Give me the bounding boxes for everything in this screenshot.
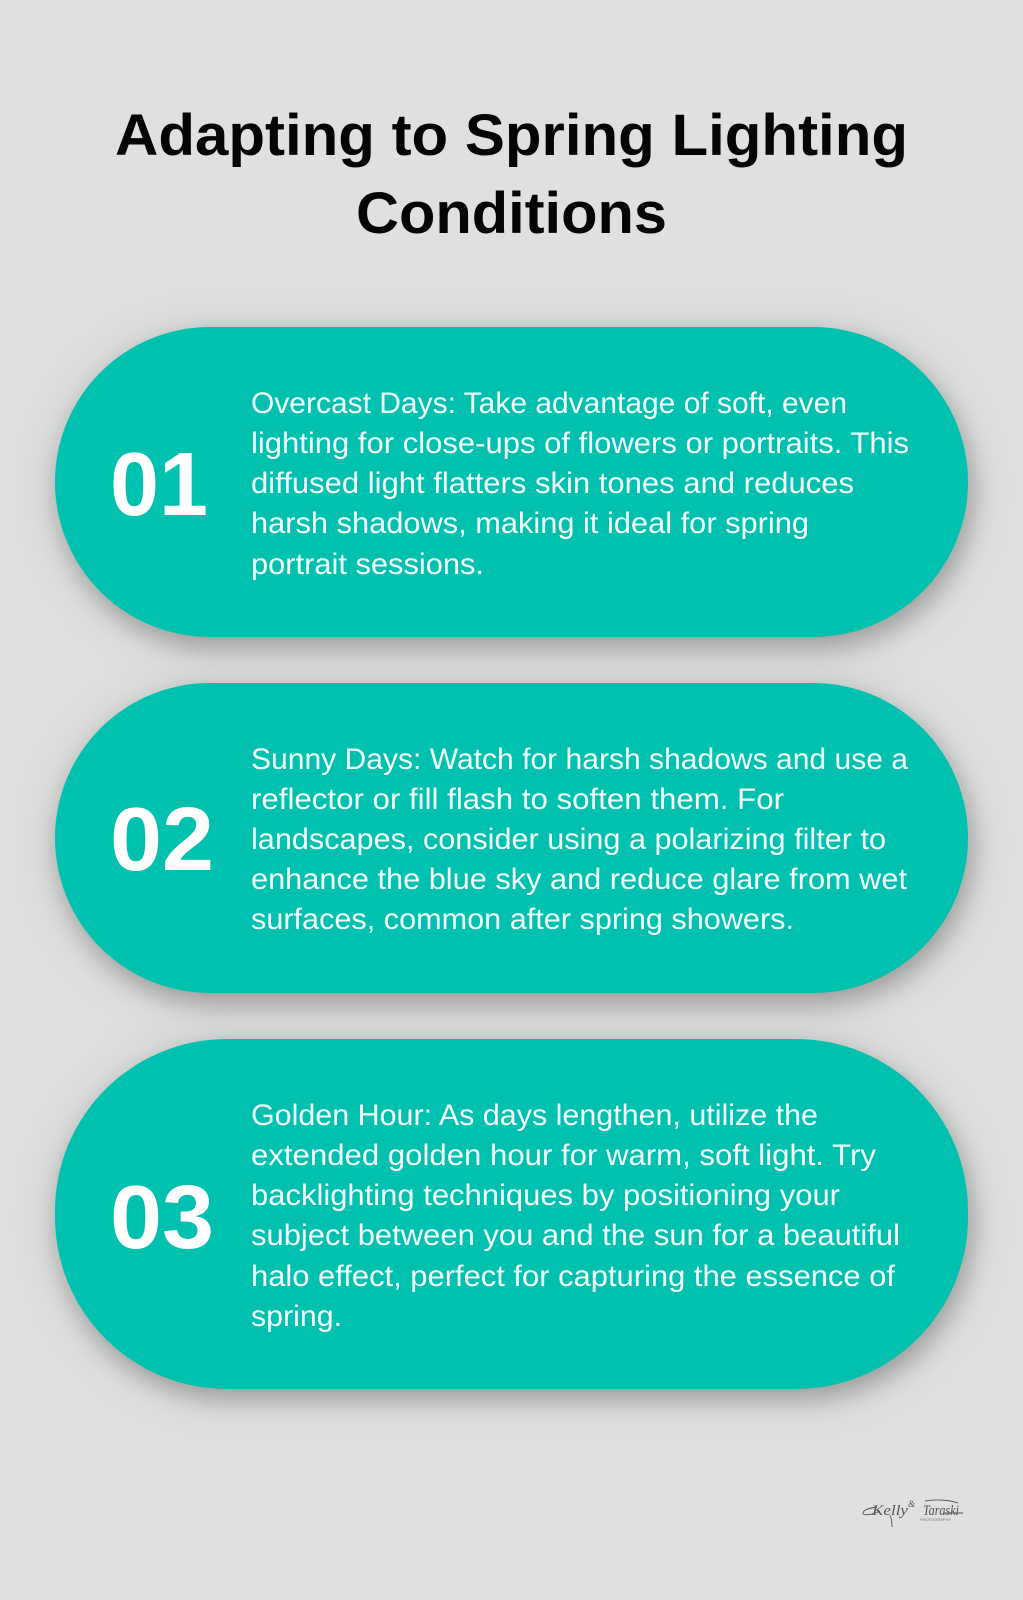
logo: signature: PHOTOGRAPHY [920,1518,952,1522]
text block: sunny days [251,743,909,936]
text block: golden hour: extended golden hour for warm, soft light. Try [251,1139,876,1172]
step number 01: 01 [110,435,208,535]
text block: overcast days: portrait sessions. [251,548,484,581]
step number 03: 03 [110,1168,214,1268]
panel: sunny days [55,683,968,993]
text block: golden hour: halo effect, perfect for capturing the essence of [251,1260,896,1293]
text block: golden hour: backlighting techniques by positioning your [251,1179,840,1212]
logo: signature [863,1499,963,1527]
text block: golden hour: subject between you and the sun for a beautiful [251,1219,900,1252]
panel background: sunny days [55,683,968,993]
text block: overcast days [251,387,909,581]
text block: sunny days: landscapes, consider using a polarizing filter to [251,823,886,856]
text block: overcast days: Overcast Days: Take advantage of soft, even [251,387,847,420]
logo: signature: & [908,1499,915,1509]
text block: sunny days: surfaces, common after spring showers. [251,903,794,936]
title: Adapting to Spring Lighting [115,103,908,168]
step number 02: 02 [110,790,214,890]
text block: golden hour: Golden Hour: As days lengthen, utilize the [251,1099,818,1132]
text block: golden hour: spring. [251,1300,342,1333]
title [115,103,908,246]
panel: overcast days [55,327,968,637]
panel: golden hour [55,1039,968,1389]
text block: sunny days: reflector or fill flash to soften them. For [251,783,784,816]
title: Conditions [356,181,667,246]
logo: signature: Kelly [871,1503,908,1519]
panel background: overcast days [55,327,968,637]
text block: overcast days: diffused light flatters skin tones and reduces [251,467,854,500]
logo: signature: Taraski [923,1503,959,1519]
panel background: golden hour [55,1039,968,1389]
text block: sunny days: enhance the blue sky and reduce glare from wet [251,863,907,896]
text block: golden hour [251,1099,900,1333]
text block: overcast days: harsh shadows, making it ideal for spring [251,507,809,540]
text block: overcast days: lighting for close-ups of flowers or portraits. This [251,427,909,460]
text block: sunny days: Sunny Days: Watch for harsh shadows and use a [251,743,909,776]
